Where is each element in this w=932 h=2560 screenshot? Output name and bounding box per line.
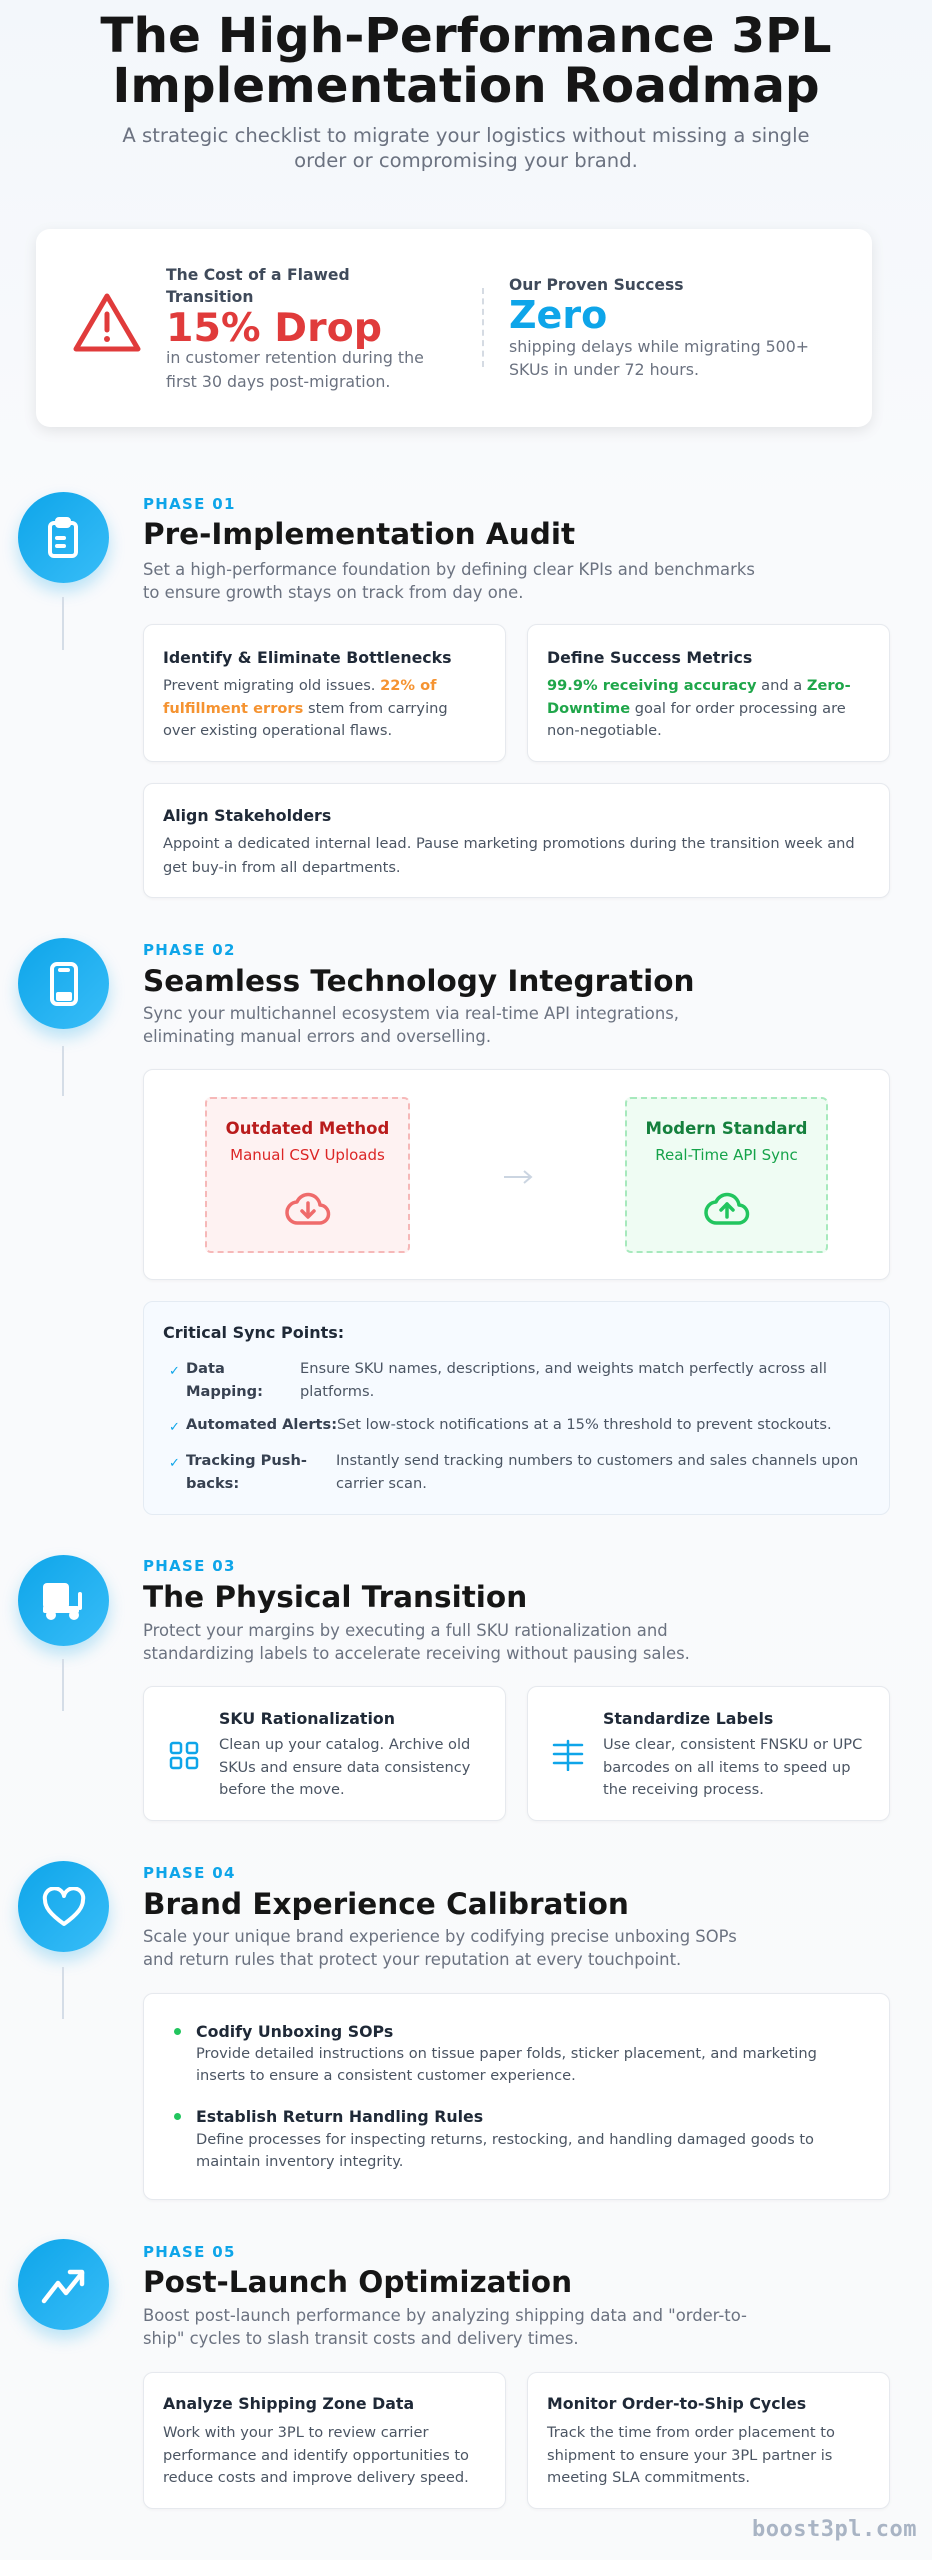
phase 04 description: Scale your unique brand experience by codifying precise unboxing SOPs — [143, 1927, 737, 1946]
item: data mapping — [169, 1360, 827, 1400]
card: success metrics: Define Success Metrics — [547, 648, 752, 667]
phase 01 description: to ensure growth stays on track from day one. — [143, 582, 523, 602]
critical sync points panel: Automated Alerts:Set low-stock notifications at a 15% threshold to prevent stockouts. — [186, 1416, 832, 1433]
card: stakeholders: get buy-in from all departments. — [163, 858, 401, 876]
icon: grid — [170, 1742, 198, 1770]
critical sync points panel: ✓ — [169, 1364, 180, 1379]
card: order-to-ship: shipment to ensure your 3PL partner is — [547, 2446, 832, 2464]
card: brand list — [143, 1993, 890, 2200]
icon: barcode — [552, 1740, 584, 1771]
stat: success — [509, 276, 809, 379]
card: sku rationalization: SKUs and ensure data consistency — [219, 1758, 470, 1776]
card: sku rationalization: Clean up your catalog. Archive old — [219, 1736, 470, 1753]
card: shipping zone — [143, 2372, 506, 2509]
modern standard box: Real-Time API Sync — [655, 1146, 798, 1164]
card: success metrics: Downtime goal for order processing are — [547, 700, 846, 716]
phase 03 description — [143, 1621, 690, 1662]
outdated method box: Outdated Method — [226, 1119, 389, 1138]
phase 03 description: standardizing labels to accelerate receiving without pausing sales. — [143, 1644, 690, 1662]
card: order-to-ship: meeting SLA commitments. — [547, 2469, 750, 2486]
card: standardize labels — [527, 1686, 890, 1821]
card: standardize labels: Standardize Labels — [603, 1709, 773, 1728]
phase 02 heading: Seamless Technology Integration — [143, 964, 695, 998]
card: stakeholders: Appoint a dedicated internal lead. Pause marketing promotions during the transition week and — [163, 835, 855, 852]
card: bottlenecks: over existing operational flaws. — [163, 722, 392, 739]
card: stakeholders — [143, 783, 890, 898]
phase 05 description: ship" cycles to slash transit costs and delivery times. — [143, 2328, 579, 2348]
card: stakeholders: Align Stakeholders — [163, 806, 331, 825]
card: order-to-ship — [527, 2372, 890, 2509]
phase 01 heading: Pre-Implementation Audit — [143, 517, 575, 551]
title: The High-Performance 3PL — [100, 8, 832, 64]
phase 01 icon — [18, 492, 109, 583]
card: success metrics: non-negotiable. — [547, 722, 662, 739]
item: unboxing — [174, 2022, 817, 2084]
stat: cost: The Cost of a Flawed — [166, 266, 350, 284]
stat card: shipping delays while migrating 500+ — [509, 337, 809, 356]
critical sync points panel: Ensure SKU names, descriptions, and weights match perfectly across all — [300, 1360, 827, 1377]
item: unboxing: Provide detailed instructions on tissue paper folds, sticker placement, and marketing — [196, 2045, 817, 2062]
card: sku rationalization: SKU Rationalization — [219, 1709, 395, 1728]
card: order-to-ship: Track the time from order placement to — [547, 2424, 835, 2441]
critical sync points panel: Instantly send tracking numbers to customers and sales channels upon — [336, 1452, 858, 1469]
item: tracking push-backs — [169, 1452, 858, 1492]
item: returns: Establish Return Handling Rules — [196, 2107, 483, 2126]
arrow — [504, 1170, 532, 1184]
phase 05 label: PHASE 05 — [143, 2243, 236, 2261]
divider — [482, 288, 484, 367]
icon: cloud upload — [704, 1192, 750, 1225]
phase 01 label: PHASE 01 — [143, 495, 236, 513]
card: sku rationalization — [143, 1686, 506, 1821]
critical sync points panel: Data — [186, 1360, 225, 1377]
stat: cost: Transition — [166, 288, 253, 306]
phase 04 description: and return rules that protect your reputation at every touchpoint. — [143, 1950, 681, 1968]
modern standard box — [625, 1097, 828, 1253]
item: unboxing: inserts to ensure a consistent customer experience. — [196, 2067, 576, 2084]
phase 02 label: PHASE 02 — [143, 941, 236, 959]
phase 02 description — [143, 1004, 679, 1046]
phase 01 description — [143, 560, 755, 602]
critical sync points panel: carrier scan. — [336, 1475, 427, 1492]
phase 05 icon — [18, 2239, 109, 2330]
card: bottlenecks: Identify & Eliminate Bottlenecks — [163, 648, 452, 667]
title: Implementation Roadmap — [112, 58, 820, 114]
stat card: Zero — [509, 293, 607, 337]
outdated method box — [205, 1097, 410, 1253]
title — [100, 8, 832, 114]
subtitle: order or compromising your brand. — [294, 149, 638, 172]
phase 04 icon — [18, 1861, 109, 1952]
item: returns: Define processes for inspecting returns, restocking, and handling damaged goods to — [196, 2131, 814, 2148]
stat card: in customer retention during the — [166, 348, 424, 367]
card: bottlenecks: Prevent migrating old issues. 22% of — [163, 677, 436, 694]
critical sync points panel: ✓ — [169, 1456, 180, 1471]
phase 04 label: PHASE 04 — [143, 1864, 236, 1882]
phase 04 description — [143, 1927, 737, 1968]
critical sync points panel: platforms. — [300, 1383, 374, 1400]
phase 03 icon — [18, 1555, 109, 1646]
critical sync points panel: ✓ — [169, 1420, 180, 1435]
critical sync points panel: Critical Sync Points: — [163, 1323, 344, 1342]
card: standardize labels: Use clear, consistent FNSKU or UPC — [603, 1736, 862, 1753]
modern standard box: Modern Standard — [646, 1119, 807, 1138]
phase 05 heading: Post-Launch Optimization — [143, 2265, 572, 2299]
item: returns: maintain inventory integrity. — [196, 2153, 403, 2170]
card: success metrics — [527, 624, 890, 762]
stat card: first 30 days post-migration. — [166, 372, 390, 391]
card: bottlenecks — [143, 624, 506, 762]
footer brand: boost3pl.com — [752, 2517, 917, 2542]
card: success metrics: 99.9% receiving accuracy and a Zero- — [547, 677, 851, 694]
item: returns — [174, 2107, 814, 2170]
comparison panel — [143, 1069, 890, 1280]
critical sync points panel: Tracking Push- — [186, 1452, 307, 1469]
critical sync points panel: backs: — [186, 1475, 239, 1492]
stat: success: Our Proven Success — [509, 276, 684, 294]
stat card: 15% Drop — [166, 305, 382, 351]
outdated method box: Manual CSV Uploads — [230, 1146, 385, 1164]
phase 02 description: Sync your multichannel ecosystem via real-time API integrations, — [143, 1004, 679, 1023]
icon: cloud download — [285, 1192, 330, 1225]
phase 05 description: Boost post-launch performance by analyzing shipping data and "order-to- — [143, 2306, 747, 2325]
stat card — [36, 229, 872, 427]
stat: cost — [166, 266, 424, 391]
subtitle: A strategic checklist to migrate your logistics without missing a single — [122, 124, 810, 147]
phase 02 description: eliminating manual errors and overselling. — [143, 1026, 491, 1046]
card: bottlenecks: fulfillment errors stem from carrying — [163, 700, 448, 716]
phase 03 heading: The Physical Transition — [143, 1580, 527, 1614]
stat card: SKUs in under 72 hours. — [509, 360, 699, 379]
phase 03 label: PHASE 03 — [143, 1557, 236, 1575]
card: shipping zone: reduce costs and improve delivery speed. — [163, 2469, 469, 2486]
critical sync points panel — [143, 1301, 890, 1515]
card: standardize labels: barcodes on all items to speed up — [603, 1758, 851, 1776]
phase 05 description — [143, 2306, 747, 2348]
card: shipping zone: Work with your 3PL to review carrier — [163, 2424, 428, 2441]
phase 02 icon — [18, 938, 109, 1029]
card: order-to-ship: Monitor Order-to-Ship Cycles — [547, 2394, 806, 2413]
phase 01 description: Set a high-performance foundation by defining clear KPIs and benchmarks — [143, 560, 755, 579]
item: unboxing: Codify Unboxing SOPs — [196, 2022, 393, 2041]
icon: warning — [74, 294, 140, 352]
card: standardize labels: the receiving process. — [603, 1781, 764, 1798]
card: shipping zone: performance and identify opportunities to — [163, 2446, 469, 2464]
critical sync points panel: Mapping: — [186, 1383, 263, 1400]
card: shipping zone: Analyze Shipping Zone Data — [163, 2394, 414, 2413]
phase 04 heading: Brand Experience Calibration — [143, 1887, 629, 1921]
subtitle — [122, 124, 810, 172]
card: sku rationalization: before the move. — [219, 1781, 345, 1798]
phase 03 description: Protect your margins by executing a full SKU rationalization and — [143, 1621, 668, 1640]
item: automated alerts — [169, 1416, 832, 1435]
